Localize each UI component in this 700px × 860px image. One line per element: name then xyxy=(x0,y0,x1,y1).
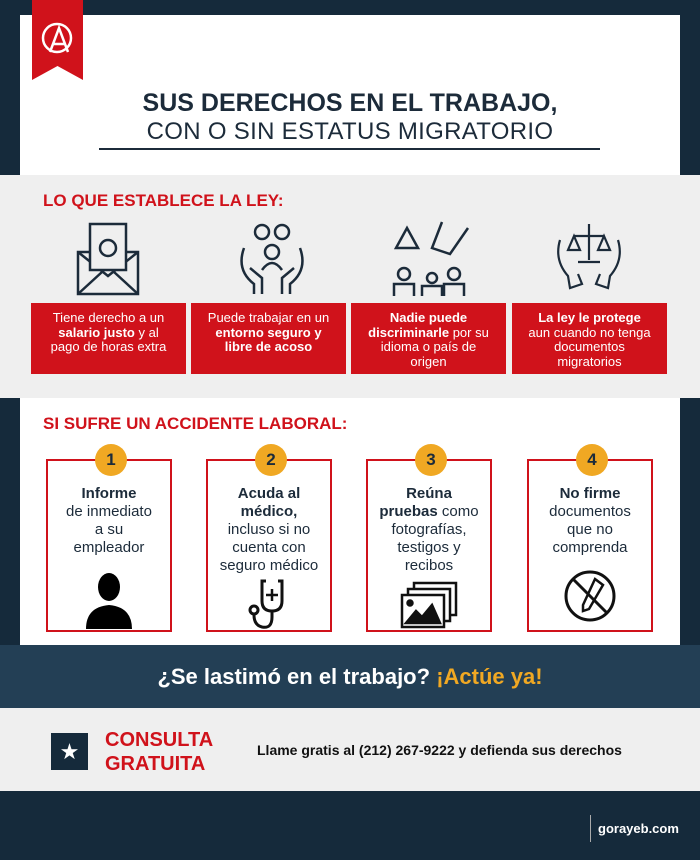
box: protection: La ley le protege aun cuando no tenga documentos migratorios xyxy=(528,310,651,368)
card 2: seguro médico xyxy=(220,557,318,574)
footer website xyxy=(590,815,679,842)
box: safe environment: Puede trabajar en un entorno seguro y libre de acoso xyxy=(208,310,329,354)
card 3 xyxy=(366,459,492,632)
title xyxy=(143,89,557,145)
icon: no pen xyxy=(564,570,616,622)
heading: law: LO QUE ESTABLECE LA LEY: xyxy=(43,191,284,210)
card 3: recibos xyxy=(405,557,453,574)
heading: accident: SI SUFRE UN ACCIDENTE LABORAL: xyxy=(43,414,347,433)
card 2: médico, xyxy=(241,503,297,520)
card 2: 2 xyxy=(266,450,276,469)
card 1 xyxy=(46,459,172,632)
card 4: comprenda xyxy=(552,539,628,556)
card 1: Informe xyxy=(81,485,136,502)
top white panel xyxy=(20,15,680,175)
text: phone: Llame gratis al (212) 267-9222 y defienda sus derechos xyxy=(257,742,622,758)
title: SUS DERECHOS EN EL TRABAJO, xyxy=(143,89,557,117)
text: consulta gratuita xyxy=(105,729,213,775)
text: consulta gratuita: GRATUITA xyxy=(105,753,205,775)
card 3: testigos y xyxy=(397,539,461,556)
card 1: empleador xyxy=(74,539,144,556)
icon: discrimination xyxy=(392,222,469,296)
card 3: pruebas como xyxy=(379,503,479,520)
icon: stethoscope xyxy=(248,580,284,629)
icon: envelope money xyxy=(76,222,140,296)
banner: act now: ¿Se lastimó en el trabajo? ¡Actúe ya! xyxy=(157,664,543,689)
logo ribbon xyxy=(32,0,83,80)
box: salary: Tiene derecho a un salario justo y al pago de horas extra xyxy=(51,310,166,354)
card 1: 1 xyxy=(106,450,116,469)
card 2: Acuda al xyxy=(238,485,300,502)
box: salary xyxy=(31,303,186,374)
card 1: de inmediato xyxy=(66,503,152,520)
card 4: que no xyxy=(567,521,613,538)
box: protection xyxy=(512,303,667,374)
icon: scales hands xyxy=(557,224,621,290)
box: discrimination xyxy=(351,303,506,374)
icon: photos xyxy=(400,582,458,628)
card 4 xyxy=(527,459,653,632)
panel: law xyxy=(0,175,700,398)
icon: star xyxy=(51,733,88,770)
card 4: 4 xyxy=(587,450,597,469)
card 1: a su xyxy=(95,521,123,538)
card 3: fotografías, xyxy=(391,521,467,538)
title: CON O SIN ESTATUS MIGRATORIO xyxy=(147,118,553,145)
panel: consultation xyxy=(0,708,700,791)
card 3: Reúna xyxy=(406,485,452,502)
card 2: incluso si no xyxy=(228,521,310,538)
icon: star: ★ xyxy=(60,739,79,764)
icon: hands people xyxy=(240,224,304,294)
card 2: cuenta con xyxy=(232,539,306,556)
card 4: No firme xyxy=(560,485,620,502)
banner: act now xyxy=(0,645,700,708)
box: safe environment xyxy=(191,303,346,374)
card 2 xyxy=(206,459,332,632)
card 4: documentos xyxy=(549,503,631,520)
card 3: 3 xyxy=(426,450,436,469)
icon: person xyxy=(86,573,132,629)
box: discrimination: Nadie puede discriminarle por su idioma o país de origen xyxy=(368,310,489,368)
text: consulta gratuita: CONSULTA xyxy=(105,729,213,751)
footer website: gorayeb.com xyxy=(598,821,679,836)
panel: accident xyxy=(20,398,680,645)
